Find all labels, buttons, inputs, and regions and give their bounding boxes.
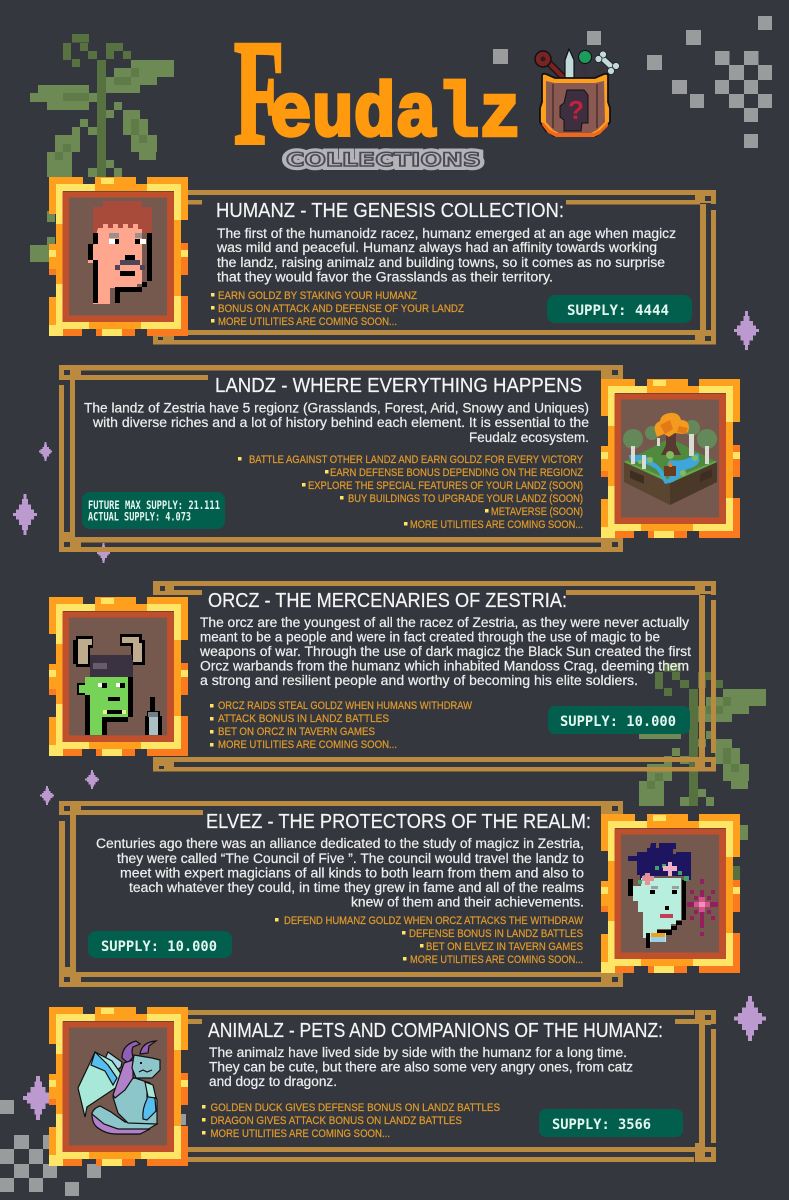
orcz description: The orcz are the youngest of all the racez of Zestria, as they were never actually: [200, 615, 689, 630]
landz utilities: METAVERSE (SOON): [491, 506, 583, 518]
humanz picture frame: [49, 177, 188, 336]
panel: orcz: [49, 581, 716, 772]
elvez picture frame: [601, 814, 740, 973]
humanz portrait: [88, 201, 152, 304]
panel: animalz: [49, 1007, 716, 1166]
animalz border: [188, 1010, 716, 1162]
animalz utilities: [202, 1102, 500, 1140]
humanz border: [153, 190, 716, 344]
title: [234, 10, 521, 176]
icon: bag with tools: [535, 49, 620, 137]
humanz utilities: [211, 290, 464, 328]
animalz description: They can be cute, but there are also some very angry ones, from catz: [209, 1060, 633, 1074]
landz description: Feudalz ecosystem.: [469, 430, 589, 445]
orcz description: [199, 615, 691, 688]
landz utilities: [238, 454, 583, 531]
elvez description: knew of them and their achievements.: [351, 894, 584, 910]
panel: landz: [59, 365, 740, 552]
landz utilities: EARN DEFENSE BONUS DEPENDING ON THE REGIONZ: [330, 467, 583, 479]
title letter F: F: [234, 10, 284, 176]
orcz utilities: MORE UTILITIES ARE COMING SOON...: [218, 739, 397, 751]
animalz description: and dogz to dragonz.: [209, 1074, 337, 1089]
title letters eudalz: eudalz: [270, 72, 521, 158]
landz supply badge: [82, 492, 225, 529]
orcz description: meant to be a people and were in fact created through the use of magic to be: [200, 630, 660, 644]
elvez utilities: BET ON ELVEZ IN TAVERN GAMES: [426, 941, 583, 953]
orcz supply badge: [548, 706, 690, 734]
orcz description: Orcz warbands from the humanz which inhabited Mandoss Crag, deeming them: [200, 658, 689, 674]
animalz description: The animalz have lived side by side with the humanz for a long time.: [209, 1045, 627, 1060]
plant top left: [30, 34, 174, 262]
subtitle: collections: COLLECTIONS: [286, 149, 481, 171]
humanz utilities: MORE UTILITIES ARE COMING SOON...: [218, 316, 397, 328]
panel: humanz: [49, 177, 716, 344]
humanz utilities: BONUS ON ATTACK AND DEFENSE OF YOUR LANDZ: [218, 303, 464, 315]
humanz description: that they would favor the Grasslands as their territory.: [217, 270, 553, 284]
elvez border: [59, 801, 623, 987]
orcz border: [153, 581, 716, 772]
elvez utilities: DEFEND HUMANZ GOLDZ WHEN ORCZ ATTACKS THE WITHDRAW: [284, 915, 584, 927]
decoration: grey pixel squares bottom left: [0, 1100, 186, 1196]
elvez description: teach whatever they could, in time they grew in fame and all of the realms: [129, 880, 584, 895]
elvez description: [96, 836, 584, 910]
humanz description: the landz, raising animalz and building towns, so it comes as no surprise: [217, 255, 665, 270]
animalz supply badge: SUPPLY: 3566: [552, 1117, 651, 1133]
landz heading: LANDZ - WHERE EVERYTHING HAPPENS: [215, 374, 582, 397]
elvez utilities: MORE UTILITIES ARE COMING SOON...: [410, 954, 583, 966]
orcz utilities: [210, 700, 473, 751]
landz supply badge: ACTUAL SUPPLY: 4.073: [88, 510, 191, 524]
animalz picture frame: [49, 1007, 188, 1166]
humanz description: The first of the humanoidz racez, humanz emerged at an age when magicz: [217, 226, 676, 241]
plant middle right: [622, 663, 766, 891]
orcz description: weapons of war. Through the use of dark magicz the Black Sun created the first: [199, 644, 691, 659]
orcz utilities: ORCZ RAIDS STEAL GOLDZ WHEN HUMANS WITHDRAW: [218, 700, 473, 712]
orcz supply badge: SUPPLY: 10.000: [560, 714, 676, 730]
landz utilities: BUY BUILDINGS TO UPGRADE YOUR LANDZ (SOON): [348, 493, 583, 505]
sparkles: [13, 311, 766, 1120]
subtitle: collections: COLLECTIONS: [286, 149, 481, 171]
humanz supply badge: SUPPLY: 4444: [567, 303, 669, 319]
elvez utilities: [275, 915, 584, 966]
landz illustration: [623, 413, 717, 505]
humanz utilities: EARN GOLDZ BY STAKING YOUR HUMANZ: [218, 290, 417, 302]
landz border: [59, 365, 623, 552]
orcz description: a strong and resilient people and worthy of becoming his elite soldiers.: [200, 673, 638, 688]
panel: elvez: [59, 801, 740, 987]
humanz description: was mild and peaceful. Humanz always had an affinity towards working: [216, 240, 657, 255]
animalz utilities: DRAGON GIVES ATTACK BONUS ON LANDZ BATTLES: [210, 1115, 462, 1127]
animalz heading: ANIMALZ - PETS AND COMPANIONS OF THE HUMANZ:: [208, 1019, 663, 1042]
landz utilities: MORE UTILITIES ARE COMING SOON...: [410, 519, 583, 531]
landz description: [84, 400, 589, 445]
animalz portrait: dragon: [78, 1041, 160, 1134]
elvez description: Centuries ago there was an alliance dedicated to the study of magicz in Zestria,: [96, 836, 584, 851]
animalz utilities: MORE UTILITIES ARE COMING SOON...: [210, 1128, 390, 1140]
icon: bag with tools: ?: [568, 95, 584, 125]
landz picture frame: [601, 379, 740, 538]
animalz description: [209, 1045, 633, 1089]
landz description: with diverse riches and a lot of history behind each element. It is essential to the: [92, 415, 589, 430]
humanz heading: HUMANZ - THE GENESIS COLLECTION:: [216, 199, 564, 222]
orcz utilities: ATTACK BONUS IN LANDZ BATTLES: [218, 713, 389, 725]
humanz supply badge: [547, 295, 692, 323]
orcz utilities: BET ON ORCZ IN TAVERN GAMES: [218, 726, 375, 738]
decoration: grey pixel squares top right: [493, 16, 772, 148]
landz utilities: BATTLE AGAINST OTHER LANDZ AND EARN GOLDZ FOR EVERY VICTORY: [249, 454, 583, 466]
elvez supply badge: SUPPLY: 10.000: [101, 939, 217, 955]
orcz heading: ORCZ - THE MERCENARIES OF ZESTRIA:: [208, 589, 567, 612]
orcz portrait: [73, 634, 162, 735]
elvez utilities: DEFENSE BONUS IN LANDZ BATTLES: [409, 928, 583, 940]
elvez heading: ELVEZ - THE PROTECTORS OF THE REALM:: [206, 810, 591, 833]
elvez portrait: [628, 843, 718, 948]
animalz utilities: GOLDEN DUCK GIVES DEFENSE BONUS ON LANDZ BATTLES: [210, 1102, 500, 1114]
elvez supply badge: [88, 931, 232, 958]
elvez description: they were called “The Council of Five ”. The council would travel the landz to: [117, 851, 584, 866]
landz utilities: EXPLORE THE SPECIAL FEATURES OF YOUR LANDZ (SOON): [308, 480, 583, 492]
humanz description: [216, 226, 676, 284]
animalz supply badge: [539, 1109, 683, 1137]
orcz picture frame: [49, 597, 188, 756]
elvez description: meet with expert magicians of all kinds to both learn from them and also to: [120, 866, 584, 880]
landz description: The landz of Zestria have 5 regionz (Grasslands, Forest, Arid, Snowy and Uniques): [84, 400, 589, 416]
landz supply badge: FUTURE MAX SUPPLY: 21.111: [88, 498, 220, 512]
